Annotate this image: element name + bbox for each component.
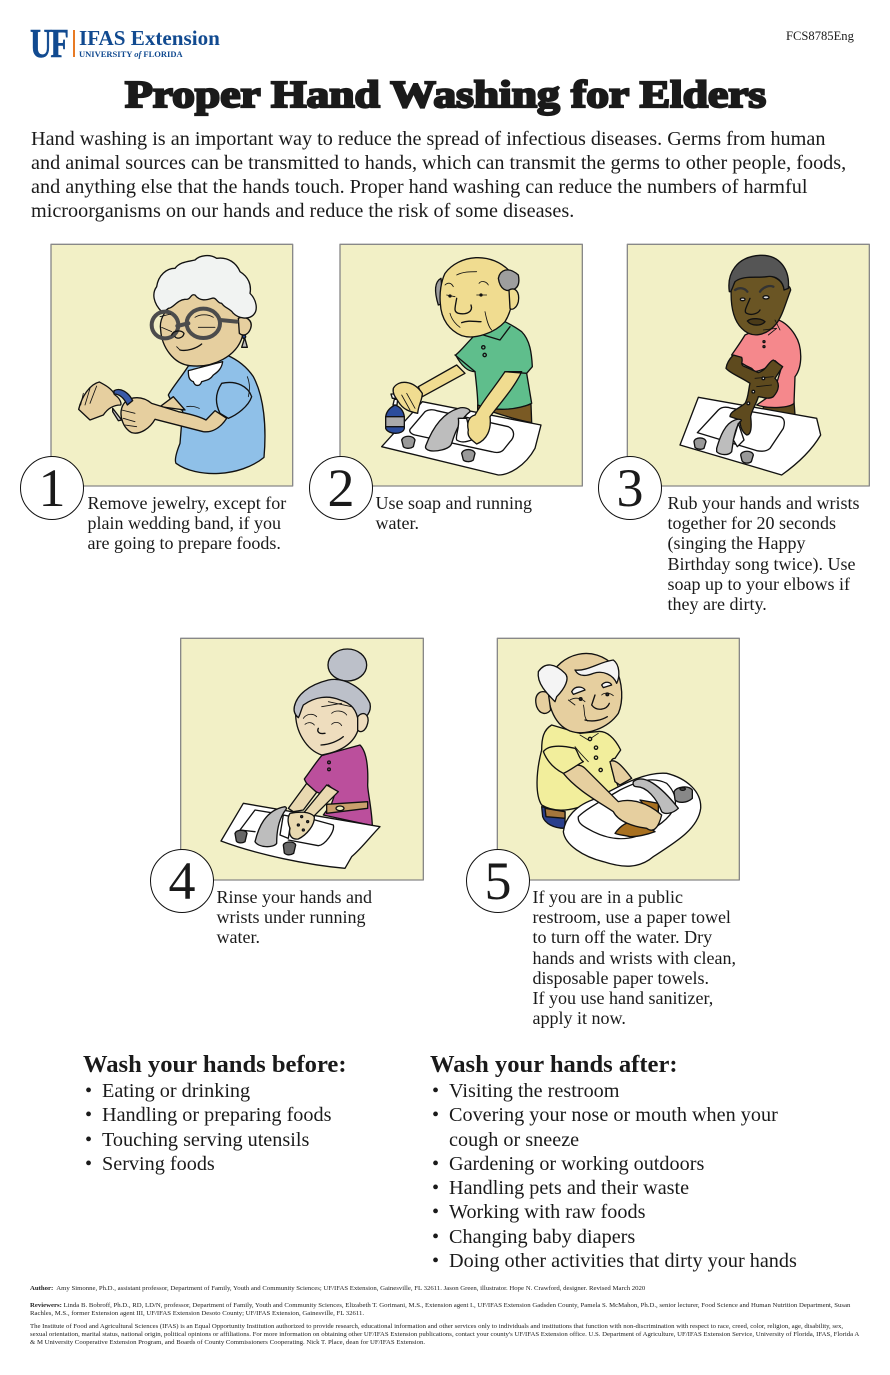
footer: reviewers: Rachles, M.S., former Extension agent III, UF/IFAS Extension Desoto County; UF/IFAS Extension, Gainesville, FL 32611. — [30, 1310, 364, 1317]
number badge 2 — [309, 456, 373, 520]
bullet items: after: Changing baby diapers — [449, 1226, 635, 1248]
intro paragraph: microorganisms on our hands and reduce the risk of some diseases. — [31, 200, 574, 222]
list: wash your hands after: • — [432, 1201, 439, 1223]
caption 5: to turn off the water. Dry — [532, 927, 712, 947]
logo: UF IFAS Extension: IFAS Extension — [79, 26, 220, 50]
number badge 4 — [150, 849, 214, 913]
footer: equal opportunity statement — [30, 1323, 860, 1346]
caption 1: Remove jewelry, except for — [88, 493, 286, 513]
list: wash your hands after: • — [432, 1153, 439, 1175]
number badge 1: 1 — [38, 458, 66, 518]
caption 5: apply it now. — [532, 1008, 626, 1028]
intro paragraph: Hand washing is an important way to reduce the spread of infectious diseases. Germs from human — [31, 128, 825, 150]
caption 3: together for 20 seconds — [668, 513, 836, 533]
illustration: woman removing bracelet — [50, 244, 294, 487]
caption 3: Rub your hands and wrists — [668, 493, 860, 513]
illustration: man drying hands — [496, 638, 740, 881]
heading: before: Wash your hands before: — [83, 1051, 347, 1078]
document code: FCS8785Eng — [786, 29, 854, 43]
caption 3: they are dirty. — [668, 594, 767, 614]
bullet items: after: Gardening or working outdoors — [449, 1153, 704, 1175]
list: wash your hands after: • — [432, 1080, 439, 1102]
illustration: woman rinsing hands — [180, 638, 424, 881]
panel: step 4 rinse — [150, 638, 424, 947]
bullet items: before: Touching serving utensils — [102, 1128, 309, 1150]
panel: step 5 dry hands — [466, 638, 740, 1028]
list: wash your hands before: • — [85, 1104, 92, 1126]
footer: author credit: Author: Amy Simonne, Ph.D., assistant professor, Department of Family, Youth and Community Sciences; UF/IFAS Extension, Gainesville, FL 32611. Jason Green, illustrator. Hope N. Crawford, designer. Revised March 2020 — [30, 1285, 645, 1292]
caption 4: water. — [216, 927, 260, 947]
caption 5: restroom, use a paper towel — [532, 907, 731, 927]
heading: after: Wash your hands after: — [430, 1051, 678, 1078]
list: wash your hands before — [83, 1051, 347, 1175]
list: wash your hands after: • — [432, 1104, 439, 1126]
caption 3: (singing the Happy — [668, 533, 805, 553]
illustration: man rubbing hands — [626, 244, 870, 487]
number badge 5 — [466, 849, 530, 913]
number badge 2: 2 — [328, 458, 354, 518]
caption 3: soap up to your elbows if — [668, 574, 850, 594]
caption 5: If you use hand sanitizer, — [532, 988, 713, 1008]
bullet items: after: cough or sneeze — [449, 1128, 579, 1150]
caption 4 — [216, 887, 372, 947]
footer: equal opportunity statement: The Institute of Food and Agricultural Sciences (IFAS) is an Equal Opportunity Institution authorized to provide research, educational information and other services only to individuals and institutions that function with non-discrimination with respect to race, creed, color, religion, age, disability, sex, — [30, 1323, 843, 1330]
intro paragraph: and animal sources can be transmitted to hands, which can transmit the germs to other people, foods, — [31, 152, 846, 174]
logo: UF IFAS Extension: UF — [30, 20, 67, 66]
list: wash your hands after: • — [432, 1177, 439, 1199]
caption 5: hands and wrists with clean, — [532, 948, 736, 968]
caption 2: Use soap and running — [376, 493, 532, 513]
panel: step 1 remove jewelry — [20, 244, 294, 553]
number badge 3 — [598, 456, 662, 520]
number badge 4: 4 — [168, 851, 196, 911]
footer: reviewers: Reviewers: Linda B. Bobroff, Ph.D., RD, LD/N, professor, Department of Family, Youth and Community Sciences, Elizabeth T. Gorimani, M.S., Extension agent I., UF/IFAS Extension Gadsden County, Pamela S. McMahon, Ph.D., senior lecturer, Food Science and Human Nutrition Department, Susan — [30, 1302, 850, 1309]
caption 1: plain wedding band, if you — [88, 513, 281, 533]
bullet items: after: Covering your nose or mouth when your — [449, 1104, 778, 1126]
list: wash your hands after: • — [432, 1250, 439, 1272]
caption 1 — [88, 493, 286, 553]
caption 1: are going to prepare foods. — [88, 533, 281, 553]
bullet items: after: Handling pets and their waste — [449, 1177, 689, 1199]
bullet items: before: Eating or drinking — [102, 1080, 250, 1102]
list: wash your hands before: • — [85, 1153, 92, 1175]
panel: step 3 rub hands — [598, 244, 870, 614]
list: wash your hands after — [430, 1051, 797, 1272]
number badge 1 — [20, 456, 84, 520]
bullet items: after: Visiting the restroom — [449, 1080, 620, 1102]
intro paragraph: and anything else that the hands touch. Proper hand washing can reduce the numbers of harmful — [31, 176, 807, 198]
bullet items: after: Doing other activities that dirty your hands — [449, 1250, 797, 1272]
panel: step 2 soap and water — [309, 244, 583, 533]
list: wash your hands after: • — [432, 1226, 439, 1248]
footer: equal opportunity statement: & M University Cooperative Extension Program, and Boards of County Commissioners Cooperating. Nick T. Place, dean for UF/IFAS Extension. — [30, 1339, 425, 1346]
caption 5: disposable paper towels. — [532, 968, 709, 988]
caption 4: Rinse your hands and — [216, 887, 372, 907]
number badge 5: 5 — [484, 851, 512, 911]
list: wash your hands before: • — [85, 1080, 92, 1102]
bullet items: after — [432, 1080, 797, 1272]
caption 5: If you are in a public — [532, 887, 683, 907]
intro paragraph — [31, 128, 846, 222]
bullet items: before — [85, 1080, 331, 1175]
caption 5 — [532, 887, 736, 1028]
logo: UF IFAS Extension — [30, 20, 220, 66]
bullet items: before: Serving foods — [102, 1153, 215, 1175]
caption 3 — [668, 493, 860, 614]
title: Proper Hand Washing for Elders — [125, 74, 766, 116]
caption 2 — [376, 493, 532, 533]
list: wash your hands before: • — [85, 1128, 92, 1150]
bullet items: after: Working with raw foods — [449, 1201, 645, 1223]
bullet items: before: Handling or preparing foods — [102, 1104, 331, 1126]
logo: UF IFAS Extension: UNIVERSITY of FLORIDA — [79, 49, 183, 59]
footer: equal opportunity statement: sexual orientation, marital status, national origin, political opinions or affiliations. For more information on obtaining other UF/IFAS Extension publications, contact your county's UF/IFAS Extension office. U.S. Department of Agriculture, UF/IFAS Extension Service, University of Florida, IFAS, Florida A — [30, 1331, 859, 1338]
caption 4: wrists under running — [216, 907, 365, 927]
footer: reviewers — [30, 1302, 850, 1317]
caption 3: Birthday song twice). Use — [668, 554, 855, 574]
number badge 3: 3 — [616, 458, 644, 518]
caption 2: water. — [376, 513, 419, 533]
illustration: man pumping soap — [339, 244, 583, 487]
